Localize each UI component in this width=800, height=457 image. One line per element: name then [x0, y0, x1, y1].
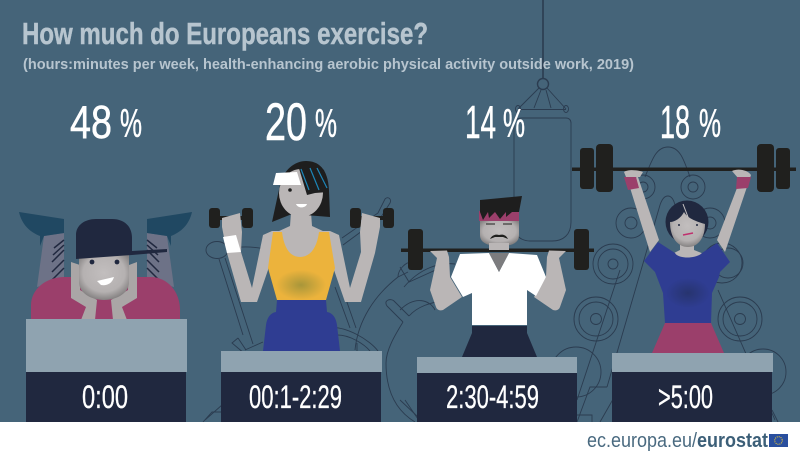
line art: weight rack: [551, 147, 786, 422]
face: [79, 255, 129, 300]
barbell: [401, 229, 594, 270]
person 4: woman lifting barbell: [572, 144, 796, 353]
panel: >5:00: >5:00: [658, 379, 713, 415]
percentage: 18%: %: [699, 102, 721, 146]
percentage: 20%: 20: [265, 93, 307, 152]
subheading: (hours:minutes per week, health-enhancing aerobic physical activity outside work, 2019): [23, 56, 634, 73]
right leg and shoe: [147, 212, 192, 287]
chest hair: [489, 253, 509, 272]
eyes and moustache: [486, 223, 512, 225]
dumbbells: [209, 208, 394, 228]
panel: 00:1-2:29: [221, 351, 382, 422]
footer: [0, 422, 800, 457]
panel: 2:30-4:59: [417, 357, 577, 422]
source url: ec.europa.eu/eurostat: [587, 430, 768, 452]
barbell: [572, 144, 796, 192]
shirt shading: [666, 278, 710, 308]
fringe: [298, 162, 328, 195]
eyes and mouth: [678, 224, 698, 235]
skirt: [263, 300, 340, 351]
shirt: [644, 242, 730, 323]
cap: [76, 219, 167, 259]
percentage: 14%: %: [503, 102, 525, 146]
panel: 0:00: [26, 319, 187, 422]
headband: [479, 211, 519, 221]
eyes and smile: [97, 277, 114, 285]
arms: [430, 250, 566, 310]
hair: [480, 196, 522, 220]
shirt: [31, 277, 180, 320]
face: [480, 221, 519, 246]
heading: How much do Europeans exercise?: [22, 16, 428, 51]
percentage: 48%: %: [120, 102, 142, 146]
top shading: [276, 270, 326, 300]
line art: kettlebell: [400, 264, 455, 416]
pants: [462, 326, 537, 357]
left leg and shoe: [19, 212, 64, 287]
percentage: 18%: 18: [660, 96, 690, 148]
line art: exercise machine: [203, 198, 445, 422]
panel: 0:00: 0:00: [82, 379, 128, 415]
tank top: [268, 232, 335, 300]
wristbands: [624, 177, 751, 190]
neck: [672, 240, 704, 262]
arms: [222, 213, 380, 302]
neck: [489, 243, 509, 250]
icon: EU flag: [769, 434, 788, 447]
hair back: [272, 161, 330, 222]
percentage: 14%: 14: [465, 96, 496, 148]
line art: punching bag: [514, 0, 571, 241]
shirt: [451, 253, 546, 325]
panel: 00:1-2:29: 00:1-2:29: [249, 379, 342, 415]
face: [670, 212, 705, 247]
hair parting: [683, 204, 688, 217]
face: [279, 169, 323, 217]
neck and chest: [277, 212, 325, 260]
person 3: man with barbell: [401, 196, 594, 357]
wristband: [223, 235, 241, 253]
arms: [627, 177, 750, 252]
panel: 2:30-4:59: 2:30-4:59: [446, 379, 539, 415]
hands: [71, 262, 137, 320]
skirt: [652, 323, 724, 353]
headband: [273, 172, 301, 185]
panel: >5:00: [612, 353, 773, 422]
person 1: man with cap: [19, 212, 192, 320]
hands: [624, 170, 751, 178]
person 2: woman with dumbbells: [209, 161, 394, 351]
hair: [666, 200, 708, 244]
percentage: 20%: %: [315, 102, 337, 146]
eye and smile: [296, 204, 307, 207]
fringe highlights: [301, 168, 327, 190]
percentage: 48%: 48: [70, 96, 112, 148]
